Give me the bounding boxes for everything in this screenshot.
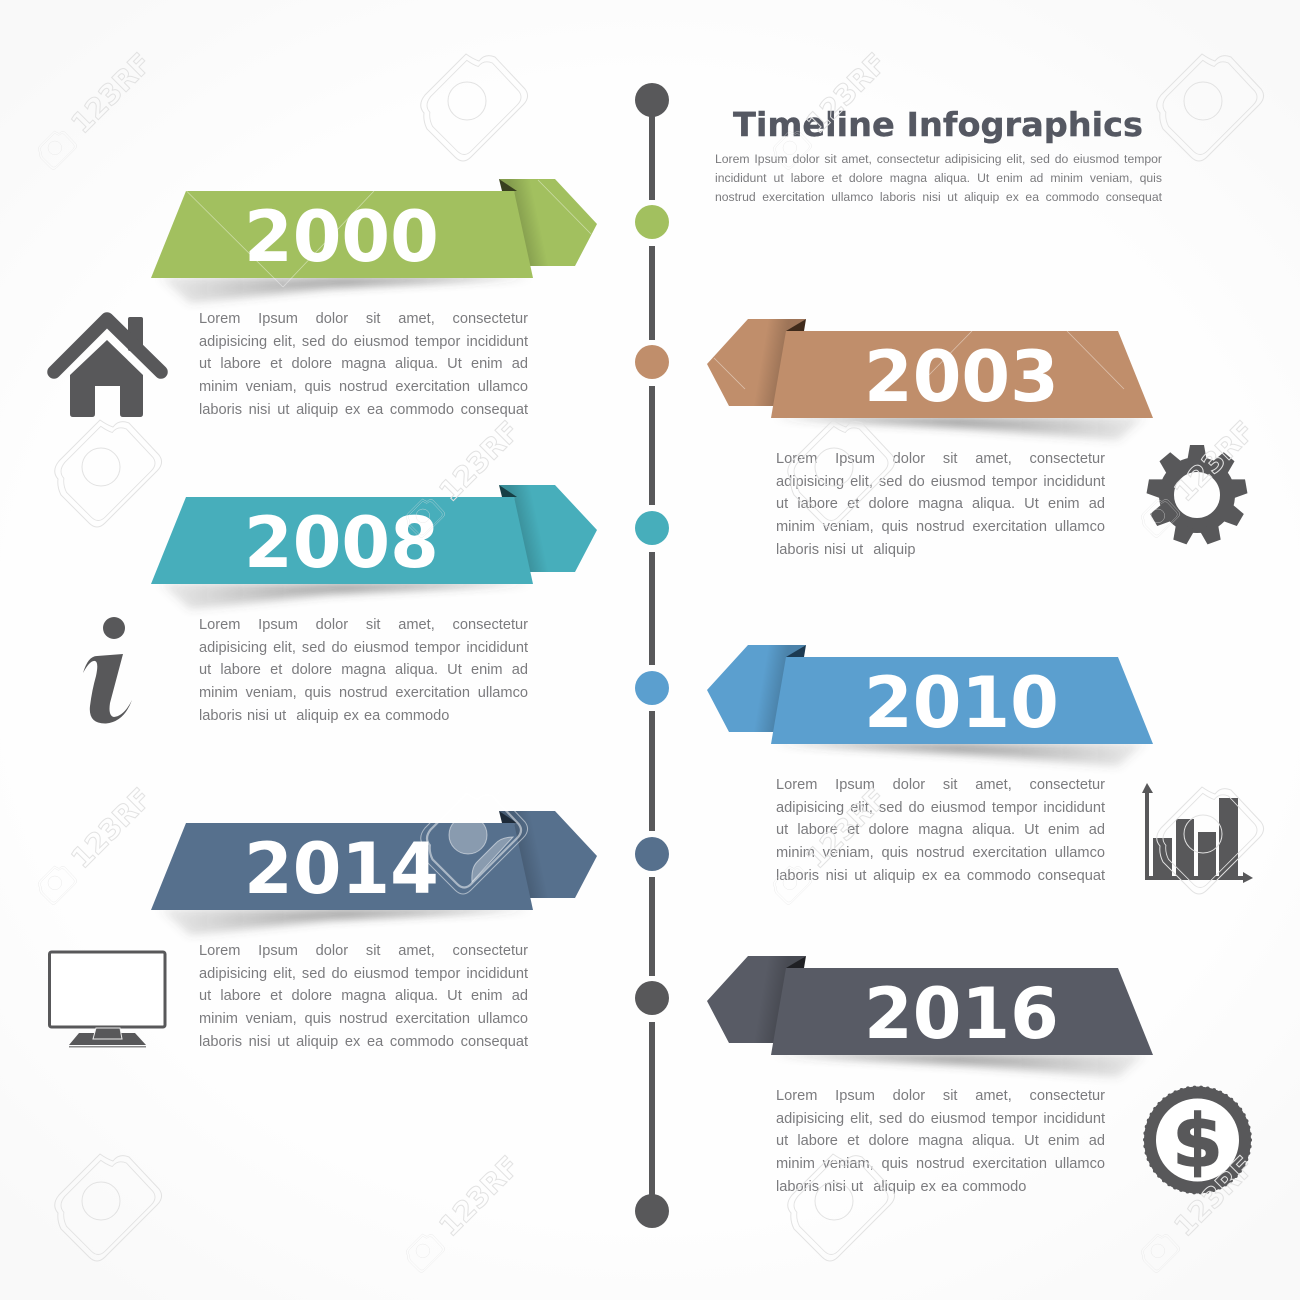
intro text: incididunt ut labore et dolore magna aliqua. Ut enim ad minim veniam, quis [715, 171, 1162, 185]
watermark overlay: 123RF [65, 47, 158, 140]
text block: 2014: minim veniam, quis nostrud exercitation ullamco [199, 1011, 528, 1027]
text block: 2010: Lorem Ipsum dolor sit amet, consectetur [776, 777, 1105, 793]
text block: 2014: Lorem Ipsum dolor sit amet, consectetur [199, 943, 528, 959]
text block: 2008: Lorem Ipsum dolor sit amet, consectetur [199, 617, 528, 633]
icon: dollar coin: $ [1172, 1099, 1223, 1183]
ribbon: 2016 [707, 956, 1153, 1077]
text block: 2014 [199, 943, 528, 1050]
intro text [715, 152, 1162, 204]
ribbon: 2008 [151, 485, 597, 609]
intro text: nostrud exercitation ullamco laboris nisi ut aliquip ex ea commodo consequat [715, 190, 1162, 204]
ribbon: 2014: 2014 [244, 828, 439, 910]
ribbon: 2016: 2016 [864, 973, 1059, 1055]
ribbon: 2010 [707, 645, 1153, 766]
text block: 2008: ut labore et dolore magna aliqua. Ut enim ad [199, 662, 528, 678]
text block: 2008: adipisicing elit, sed do eiusmod tempor incididunt [199, 640, 528, 656]
text block: 2016: ut labore et dolore magna aliqua. Ut enim ad [776, 1133, 1105, 1149]
text block: 2003: minim veniam, quis nostrud exercitation ullamco [776, 519, 1105, 535]
text block: 2010: ut labore et dolore magna aliqua. Ut enim ad [776, 822, 1105, 838]
ribbon: 2000: 2000 [244, 196, 439, 278]
text block: 2003: Lorem Ipsum dolor sit amet, consectetur [776, 451, 1105, 467]
text block: 2000: Lorem Ipsum dolor sit amet, consectetur [199, 311, 528, 327]
icon: bar chart [1142, 783, 1253, 883]
text block: 2010: adipisicing elit, sed do eiusmod tempor incididunt [776, 800, 1105, 816]
ribbon: 2000 [151, 179, 597, 303]
watermark overlay: 123RF [65, 782, 158, 875]
text block: 2003: laboris nisi ut aliquip [776, 542, 915, 558]
watermark overlay: 123RF [1168, 415, 1261, 508]
watermark overlay: 123RF [433, 415, 526, 508]
watermark overlay: 123RF [433, 1150, 526, 1243]
text block: 2016: adipisicing elit, sed do eiusmod tempor incididunt [776, 1111, 1105, 1127]
ribbon: 2003: 2003 [864, 336, 1059, 418]
watermark overlay: 123RF [800, 782, 893, 875]
text block: 2016: Lorem Ipsum dolor sit amet, consectetur [776, 1088, 1105, 1104]
text block: 2016: minim veniam, quis nostrud exercitation ullamco [776, 1156, 1105, 1172]
text block: 2000 [199, 311, 528, 418]
ribbon: 2014 [151, 811, 597, 935]
text block: 2000: ut labore et dolore magna aliqua. Ut enim ad [199, 356, 528, 372]
text block: 2008 [199, 617, 528, 724]
text block: 2003: adipisicing elit, sed do eiusmod tempor incididunt [776, 474, 1105, 490]
text block: 2014: laboris nisi ut aliquip ex ea commodo consequat [199, 1034, 528, 1050]
icon: info [83, 617, 132, 724]
timeline axis [635, 83, 669, 1228]
watermark overlay: 123RF [800, 47, 893, 140]
text block: 2000: minim veniam, quis nostrud exercitation ullamco [199, 379, 528, 395]
ribbon: 2008: 2008 [244, 502, 439, 584]
text block: 2010: minim veniam, quis nostrud exercitation ullamco [776, 845, 1105, 861]
text block: 2000: laboris nisi ut aliquip ex ea commodo consequat [199, 402, 528, 418]
intro text: Lorem Ipsum dolor sit amet, consectetur adipisicing elit, sed do eiusmod tempor [715, 152, 1162, 166]
text block: 2014: ut labore et dolore magna aliqua. Ut enim ad [199, 988, 528, 1004]
text block: 2014: adipisicing elit, sed do eiusmod tempor incididunt [199, 966, 528, 982]
text block: 2016 [776, 1088, 1105, 1195]
text block: 2003 [776, 451, 1105, 558]
icon: house [54, 317, 161, 417]
text block: 2008: laboris nisi ut aliquip ex ea commodo [199, 708, 449, 724]
title: Timeline Infographics [733, 105, 1143, 144]
text block: 2008: minim veniam, quis nostrud exercitation ullamco [199, 685, 528, 701]
text block: 2003: ut labore et dolore magna aliqua. Ut enim ad [776, 496, 1105, 512]
ribbon: 2003 [707, 319, 1153, 440]
watermark overlay: 123RF [1168, 1150, 1261, 1243]
ribbon: 2010: 2010 [864, 662, 1059, 744]
text block: 2016: laboris nisi ut aliquip ex ea commodo [776, 1179, 1026, 1195]
icon: monitor [50, 952, 165, 1048]
text block: 2010 [776, 777, 1105, 884]
text block: 2000: adipisicing elit, sed do eiusmod tempor incididunt [199, 334, 528, 350]
icon: gear [1146, 445, 1248, 545]
icon: dollar coin [1145, 1088, 1250, 1192]
text block: 2010: laboris nisi ut aliquip ex ea commodo consequat [776, 868, 1105, 884]
